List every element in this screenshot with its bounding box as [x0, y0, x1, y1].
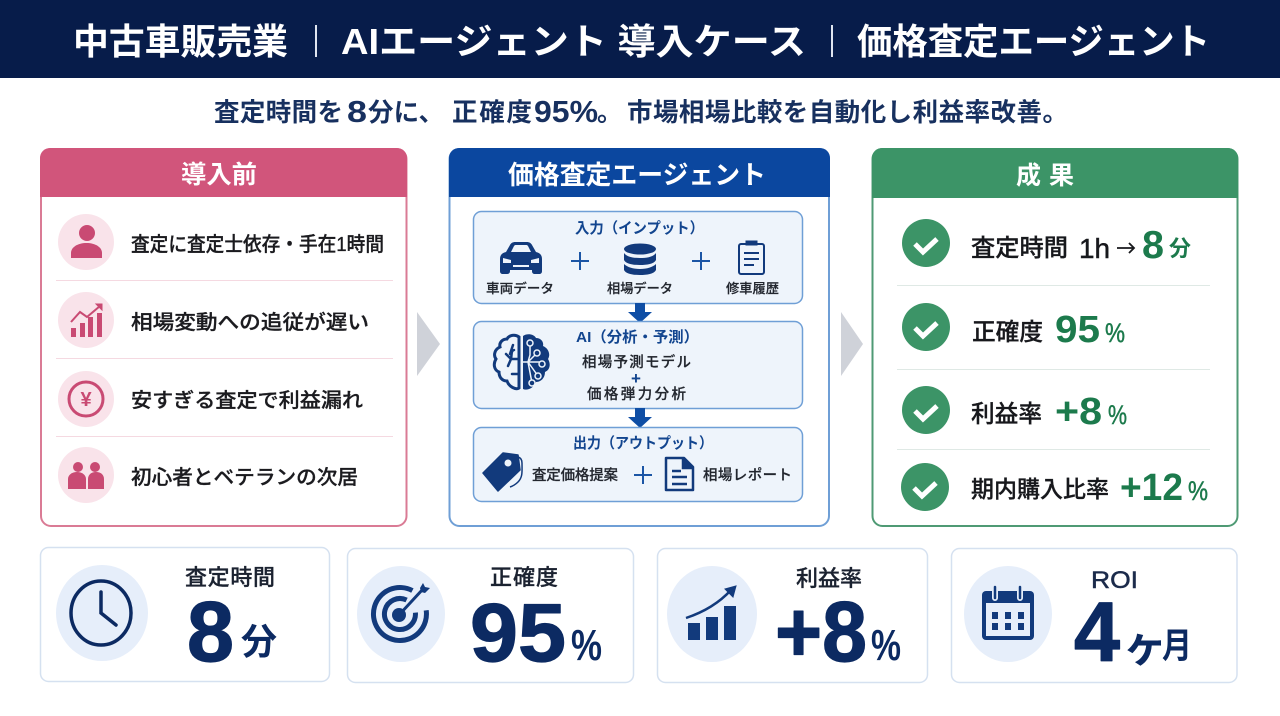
KPI card: ROI: 月	[1162, 627, 1192, 666]
icon: price tag	[483, 453, 522, 491]
icon: clipboard	[739, 241, 764, 274]
KPI card: profit rate	[658, 548, 928, 682]
result: appraisal time: 分	[1169, 236, 1191, 261]
KPI card: ROI: ヶ	[1123, 622, 1167, 671]
KPI card: accuracy: %	[571, 621, 602, 670]
icon: document	[666, 458, 693, 490]
icon: check 1	[902, 219, 950, 267]
KPI card: appraisal time: 8	[187, 585, 234, 680]
icon: check 4	[901, 463, 949, 511]
box: AI: AI（分析・予測）	[576, 328, 699, 346]
subtitle	[214, 94, 1068, 129]
icon: target	[357, 566, 445, 662]
KPI card: appraisal time: 分	[241, 621, 277, 662]
result: in-term purchase ratio: 期内購入比率	[971, 476, 1109, 502]
icon: clock	[56, 565, 148, 661]
KPI card: accuracy: 正確度	[490, 565, 558, 590]
result: appraisal time: 1h	[1079, 233, 1110, 264]
arrow: input to AI	[628, 303, 652, 323]
result: appraisal time: 査定時間	[971, 235, 1068, 262]
title banner: 中古車販売業	[73, 21, 288, 62]
subtitle: 査定時間を	[214, 99, 343, 127]
KPI card: profit rate: +8	[775, 585, 867, 680]
panel: pricing agent	[449, 148, 830, 526]
KPI card: profit rate: 利益率	[796, 566, 862, 591]
result: accuracy: %	[1105, 318, 1125, 348]
arrow: agent to results	[841, 312, 863, 376]
plus	[634, 466, 652, 484]
arrow: AI to output	[628, 408, 652, 428]
icon: growth chart	[667, 566, 757, 662]
text: slow tracking: 相場変動への追従が遅い	[131, 311, 369, 334]
KPI card: accuracy	[348, 548, 634, 682]
result: accuracy: 95	[1055, 309, 1100, 351]
icon: person	[58, 214, 114, 270]
subtitle: 正確度	[452, 99, 532, 127]
title banner: AIエージェント 導入ケース	[341, 21, 806, 62]
subtitle: 分に、	[368, 99, 444, 127]
icon: brain	[494, 334, 550, 390]
subtitle: 。	[597, 99, 623, 127]
box: AI: 価格弾力分析	[587, 386, 686, 403]
box: AI: +	[631, 369, 641, 388]
arrow: before to agent	[417, 312, 440, 376]
result: accuracy	[972, 309, 1125, 351]
KPI card: ROI: 4	[1074, 585, 1120, 679]
box: input: 相場データ	[607, 281, 673, 296]
KPI card: accuracy: 95	[470, 586, 566, 679]
subtitle: 市場相場比較を自動化し利益率改善。	[627, 99, 1068, 127]
panel: results	[872, 148, 1238, 526]
box: output: 相場レポート	[703, 467, 792, 484]
result: profit rate	[971, 391, 1127, 433]
icon: calendar	[964, 566, 1052, 662]
box: input: 入力（インプット）	[575, 220, 704, 237]
result: in-term purchase ratio: +12	[1120, 467, 1183, 509]
KPI card: appraisal time: 査定時間	[185, 565, 275, 590]
box: output: 査定価格提案	[532, 467, 618, 484]
icon: yen coin: ¥	[80, 389, 92, 411]
plus	[571, 252, 589, 270]
icon: car	[500, 242, 542, 274]
result: in-term purchase ratio: %	[1188, 476, 1208, 506]
heading: before: 導入前	[181, 161, 257, 189]
subtitle: 95%	[534, 94, 598, 129]
heading: pricing agent: 価格査定エージェント	[508, 160, 766, 190]
box: input: 車両データ	[486, 281, 554, 296]
KPI card: profit rate: %	[871, 621, 901, 670]
result: accuracy: 正確度	[972, 319, 1043, 346]
result: profit rate: %	[1108, 400, 1127, 430]
box: AI: 相場予測モデル	[582, 353, 691, 371]
result: appraisal time	[971, 224, 1191, 267]
icon: check 2	[902, 303, 950, 351]
subtitle: 8	[347, 94, 367, 129]
text: profit leakage: 安すぎる査定で利益漏れ	[131, 389, 363, 412]
box: output: 出力（アウトプット）	[573, 435, 713, 452]
title banner	[0, 0, 1280, 78]
icon: yen coin	[58, 371, 114, 427]
box: input: 修車履歴	[726, 281, 779, 296]
result: profit rate: +8	[1055, 391, 1102, 433]
result: in-term purchase ratio	[971, 467, 1208, 509]
icon: chart trending	[58, 292, 114, 348]
panel: before introduction	[40, 148, 407, 526]
result: profit rate: 利益率	[971, 401, 1042, 428]
box: AI	[474, 322, 802, 408]
icon: check 3	[902, 386, 950, 434]
text: dependency on appraisers: 査定に査定士依存・手在1時間	[131, 233, 384, 256]
KPI card: appraisal time	[40, 548, 330, 682]
text: skill gap: 初心者とベテランの次居	[131, 466, 358, 489]
box: output	[474, 428, 802, 502]
result: appraisal time: 8	[1142, 224, 1164, 267]
icon: database	[624, 244, 656, 275]
plus	[692, 252, 710, 270]
KPI card: ROI	[952, 548, 1237, 682]
box: input	[474, 212, 802, 304]
icon: two people	[58, 447, 114, 503]
heading: results: 成果	[1016, 162, 1074, 190]
title banner: 価格査定エージェント	[857, 21, 1210, 62]
KPI card: ROI: ROI	[1091, 567, 1138, 594]
